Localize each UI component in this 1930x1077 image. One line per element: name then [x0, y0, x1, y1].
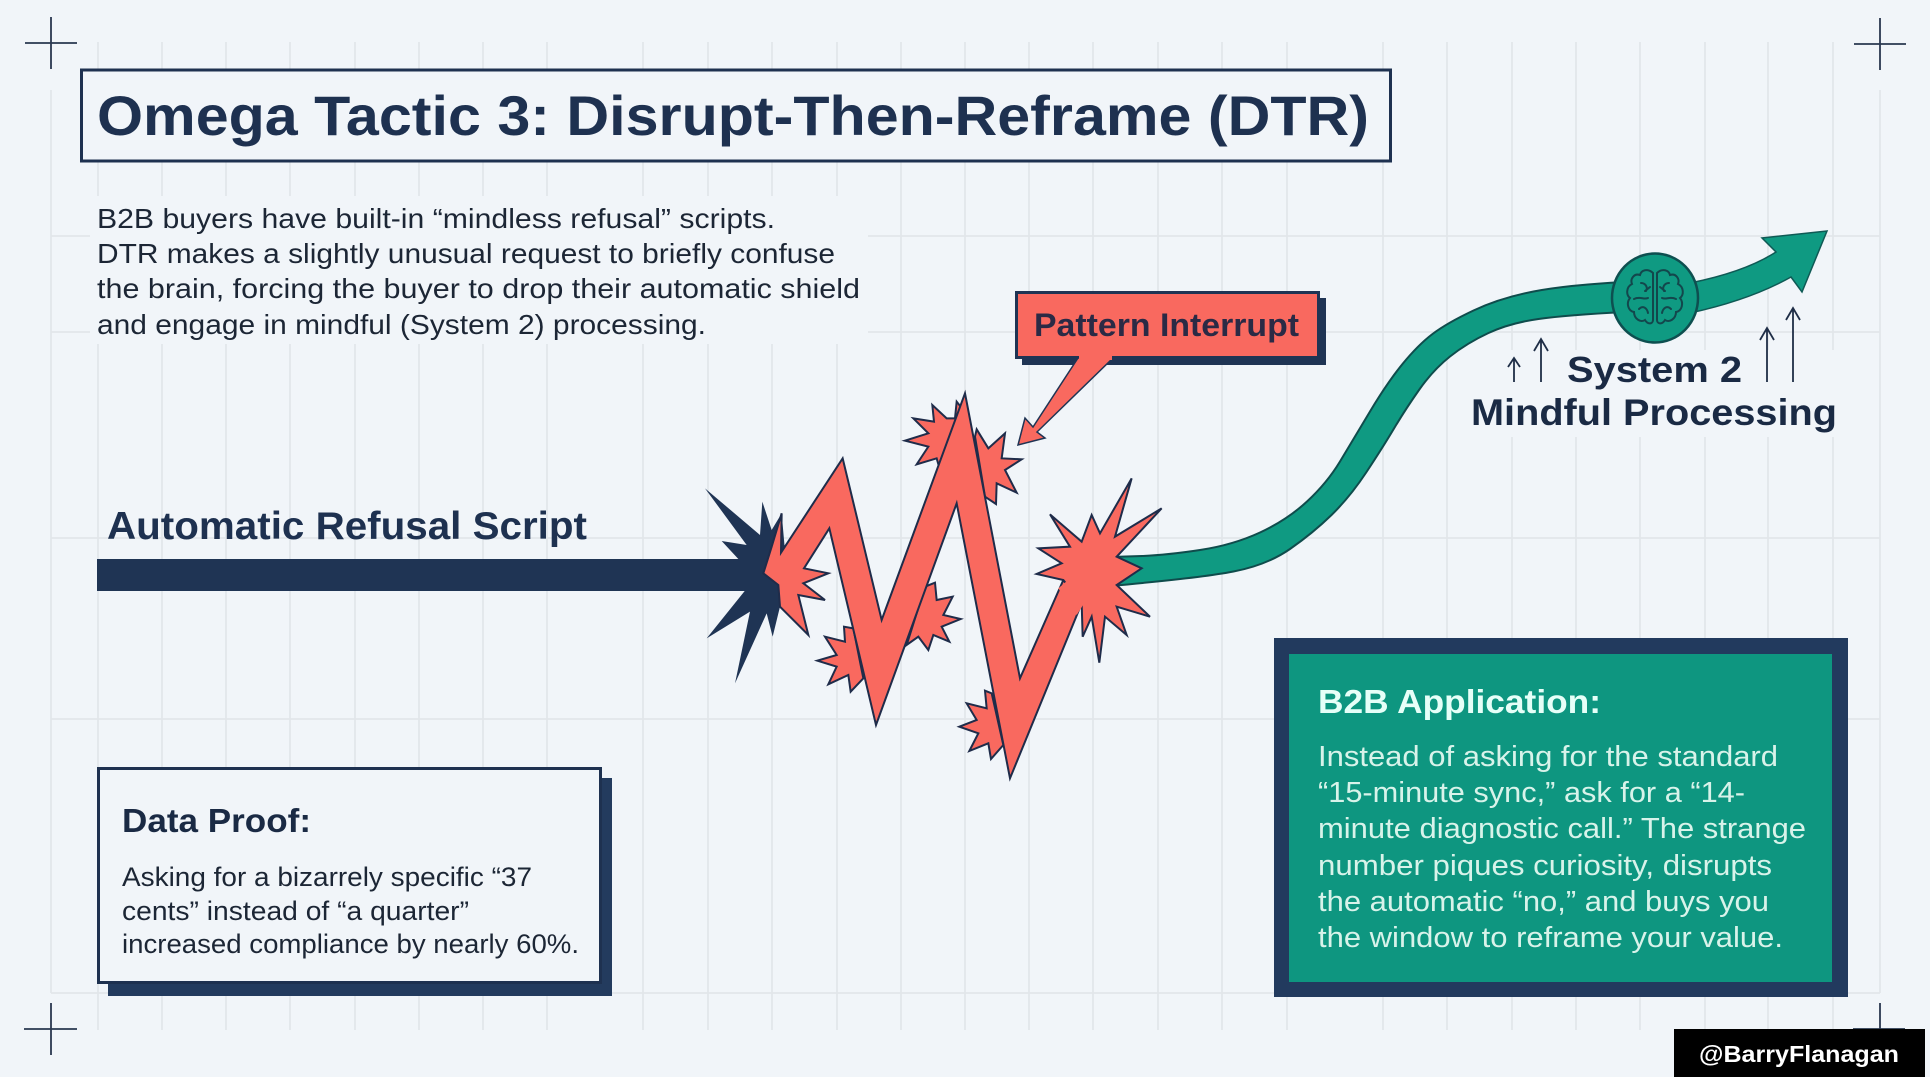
panel: data proof: cents” instead of “a quarter”: [122, 896, 469, 926]
title box: Omega Tactic 3: Disrupt-Then-Reframe (DTR): [97, 84, 1369, 147]
disruption: bursts and zigzag: [680, 393, 1162, 778]
intro text block: B2B buyers have built-in “mindless refusal” scripts.: [97, 203, 775, 234]
panel: b2b application: “15-minute sync,” ask for a “14-: [1318, 777, 1745, 809]
panel: b2b application: the window to reframe your value.: [1318, 922, 1783, 954]
panel: data proof: Data Proof:: [122, 802, 311, 839]
navy bar: automatic script: [97, 559, 777, 591]
icon: small up arrows: [1508, 308, 1800, 382]
watermark: author handle: [1674, 1029, 1925, 1077]
small burst lower left: [817, 627, 863, 692]
panel: b2b application: B2B Application:: [1318, 683, 1601, 720]
small burst lower: [959, 691, 1003, 759]
panel: b2b application: number piques curiosity, disrupts: [1318, 850, 1772, 882]
label: system 2 mindful processing: [1471, 349, 1837, 433]
panel: data proof: [98, 768, 612, 996]
panel: b2b application: minute diagnostic call.” The strange: [1318, 813, 1806, 845]
small burst mid: [907, 583, 961, 650]
small burst top right: [975, 429, 1022, 504]
panel: b2b application: Instead of asking for the standard: [1318, 741, 1778, 773]
panel: b2b application: the automatic “no,” and buys you: [1318, 886, 1769, 918]
title box: [82, 70, 1390, 161]
coral zigzag with left burst: [763, 393, 1082, 778]
panel: b2b application: [1274, 638, 1848, 997]
panel: data proof: increased compliance by nearly 60%.: [122, 929, 579, 959]
callout: pattern interrupt: [1016, 292, 1326, 445]
intro text block: [97, 203, 860, 340]
watermark: author handle: @BarryFlanagan: [1699, 1041, 1899, 1067]
teal rising arrow: [1110, 231, 1827, 586]
small burst top left: [905, 402, 963, 470]
navy burst: [680, 488, 787, 683]
label: system 2 mindful processing: System 2: [1567, 349, 1742, 390]
intro text block: and engage in mindful (System 2) processing.: [97, 309, 706, 340]
panel: data proof: Asking for a bizarrely specific “37: [122, 862, 532, 892]
label: automatic refusal script: Automatic Refusal Script: [107, 505, 587, 548]
callout: pattern interrupt: Pattern Interrupt: [1034, 307, 1299, 343]
label: system 2 mindful processing: Mindful Processing: [1471, 392, 1837, 433]
intro text block: DTR makes a slightly unusual request to briefly confuse: [97, 238, 835, 269]
coral burst right: [1037, 478, 1162, 663]
icon: brain: [1612, 254, 1698, 342]
intro text block: the brain, forcing the buyer to drop their automatic shield: [97, 273, 860, 304]
